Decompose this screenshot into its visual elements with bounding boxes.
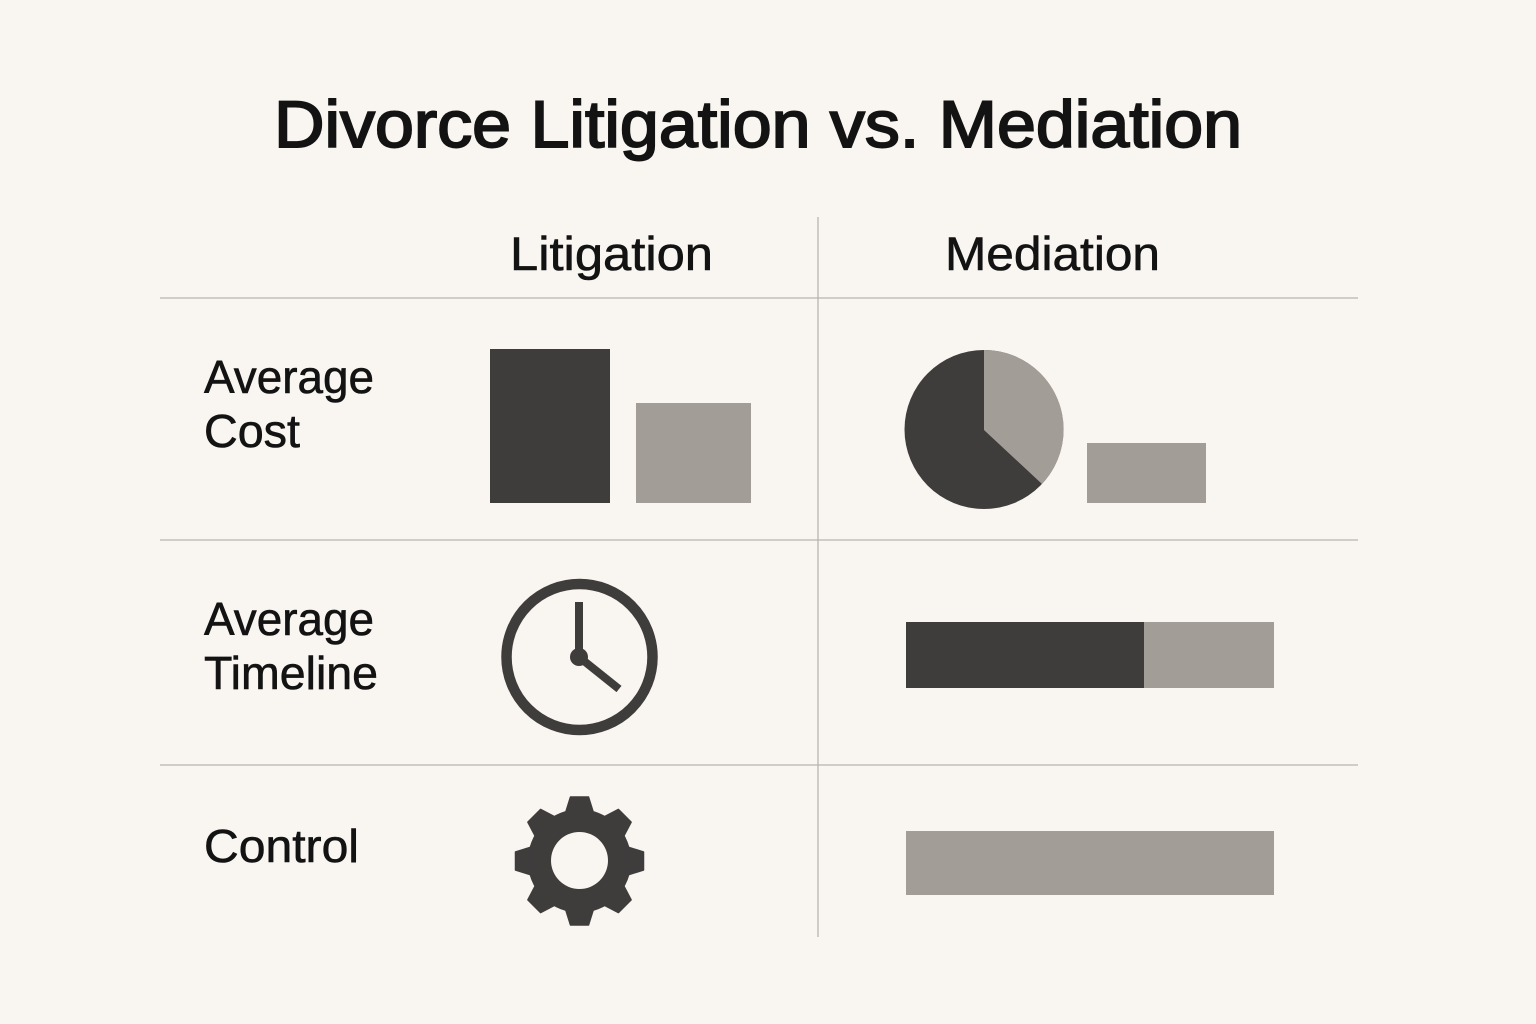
title: Divorce Litigation vs. Mediation <box>274 87 1242 161</box>
icon: gear <box>516 797 644 925</box>
litigation cost bars <box>490 349 751 503</box>
row label: Average Timeline <box>204 593 378 699</box>
row label: Average Cost: Cost <box>204 405 300 457</box>
row label: Average Cost <box>204 351 374 457</box>
row label: Average Timeline: Timeline <box>204 647 378 699</box>
mediation timeline stacked bar <box>906 622 1274 688</box>
mediation cost bar <box>1087 443 1206 503</box>
row label: Average Timeline: Average <box>204 593 374 645</box>
mediation cost pie chart <box>904 350 1064 509</box>
mediation control bar <box>906 831 1274 895</box>
row label: Average Cost: Average <box>204 351 374 403</box>
icon: clock <box>506 584 652 730</box>
row label: Control: Control <box>204 820 359 872</box>
column heading: Mediation: Mediation <box>945 227 1160 280</box>
column heading: Litigation: Litigation <box>510 227 713 280</box>
